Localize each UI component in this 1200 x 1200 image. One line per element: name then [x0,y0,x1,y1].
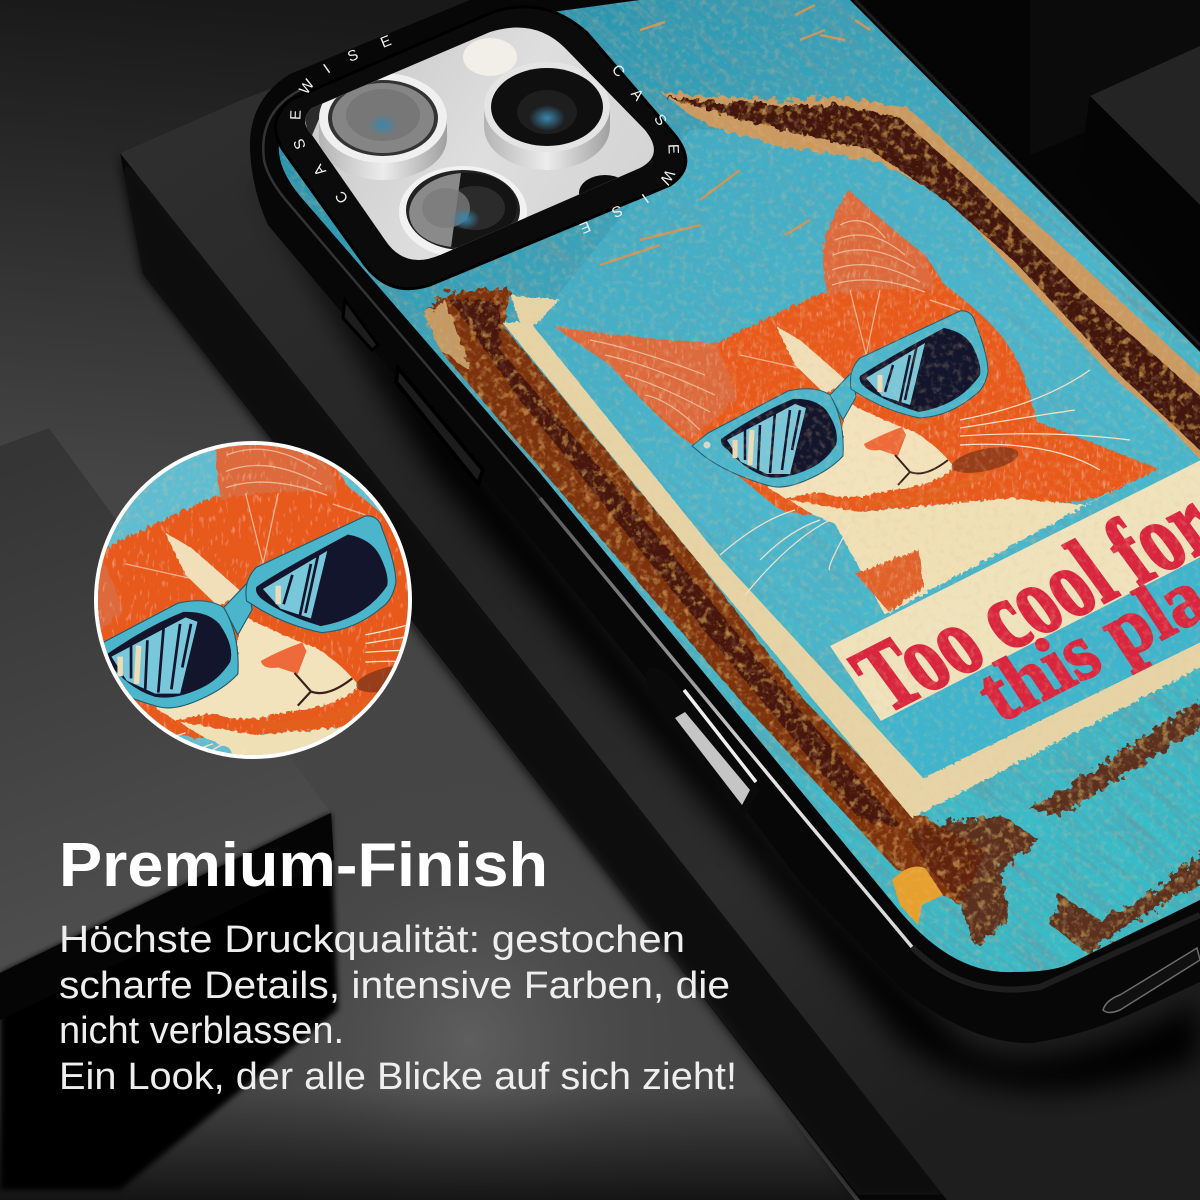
CASEWISE ring lettering: C [332,187,352,207]
lens 2 [484,62,610,170]
cheek shading [949,442,1021,478]
cat chest [790,470,1150,615]
right reflection [866,343,925,405]
nose and mouth [864,427,948,485]
CASEWISE ring lettering: A [627,86,647,104]
phone case body [250,0,1200,1043]
body copy: scharfe Details, intensive Farben, die [59,965,730,1007]
CASEWISE ring lettering: A [310,161,330,179]
left frame [692,389,843,487]
CASEWISE ring lettering: C [608,61,628,81]
paint flecks top [600,5,870,265]
right frame [850,311,988,418]
wood grain streaks [282,0,1200,972]
muzzle [768,400,955,498]
CASEWISE ring lettering: W [656,167,678,188]
CASEWISE ring lettering: E [577,217,593,237]
CASEWISE ring lettering: W [296,76,319,98]
flash [463,38,517,76]
camera island rim [275,7,686,289]
pedestal side shadow [120,153,950,1195]
left reflection [727,404,806,474]
phone shadow [250,170,1200,1091]
bridge [830,372,856,420]
CASEWISE ring lettering: E [378,32,394,52]
circle contents [0,384,582,847]
whiskers [720,370,1130,595]
CASEWISE ring lettering: S [650,111,670,129]
lower blue strip [881,555,1200,778]
paper banner [830,458,1200,721]
left lens [721,399,837,478]
chest orange patch [856,549,923,612]
sunglasses [692,311,988,487]
zoom detail circle [0,384,582,847]
CASEWISE ring lettering: I [638,190,652,206]
left streaks [745,410,800,473]
lens 3 [399,165,530,258]
case gloss rim [263,0,1200,990]
CASEWISE ring lettering: S [609,201,625,221]
CASEWISE ring lettering: S [290,136,310,152]
camera glass window [300,25,654,260]
cream panel border [502,295,1200,818]
right streaks [885,340,930,402]
body copy [59,919,737,1098]
heading: Premium-Finish [59,831,548,900]
side buttons [343,300,483,484]
front block crisp top edge [0,813,334,1020]
lidar hole [579,175,631,211]
CASEWISE ring lettering: E [287,110,305,120]
bottom vignette [0,1090,855,1200]
right lens [860,328,980,412]
front block dark face [0,813,338,1190]
lower rust patches [905,700,1200,955]
CASEWISE ring lettering: I [320,61,334,77]
orange paint fleck [892,866,943,925]
rivets [704,442,710,448]
speckle texture [250,0,1200,1000]
CASEWISE ring lettering: E [664,144,682,154]
cat illustration [553,190,1159,615]
lens 1 [319,73,447,180]
CASEWISE ring lettering [287,32,682,237]
cat ears [553,190,935,440]
cat head [553,190,1159,515]
dark backdrop top right [840,0,1200,360]
phone artwork [278,0,1200,972]
body copy: Höchste Druckqualität: gestochen [59,919,685,961]
ear fur lines [590,221,960,430]
rust frame left [425,288,985,905]
rust frame top [660,92,1200,465]
cream reflections [735,375,880,465]
inner shadow [300,25,631,258]
CASEWISE ring lettering: S [345,46,361,66]
forehead stripe [776,326,848,394]
body copy: Ein Look, der alle Blicke auf sich zieht! [59,1056,737,1098]
front block top face [0,428,331,973]
inner panel tint [530,125,1200,778]
backdrop box top right [1030,0,1200,330]
charging port [1103,948,1200,1012]
chin orange stripe [862,470,985,504]
silver side button [646,668,760,815]
body copy: nicht verblassen. [59,1010,344,1052]
